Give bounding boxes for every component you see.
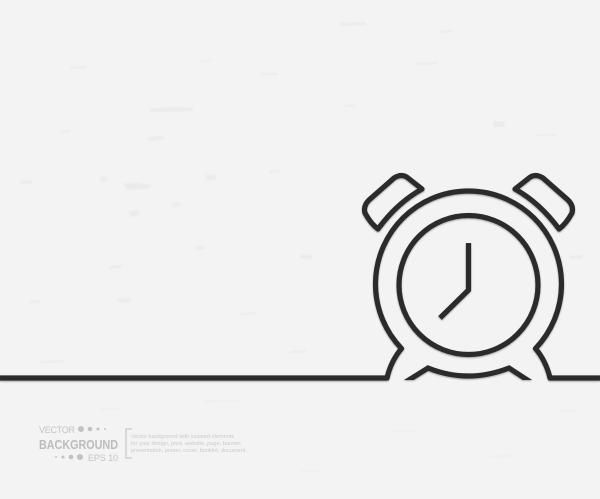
label: vector: VECTOR <box>39 425 76 435</box>
logo block: vector background <box>39 425 247 463</box>
line shadow <box>0 176 600 384</box>
description text: for your design, print, website, page, banner, <box>131 441 242 447</box>
icon: clock feet arc <box>404 368 532 383</box>
top dots <box>78 426 106 432</box>
bottom dots <box>55 454 83 460</box>
icon: clock hands <box>440 243 468 318</box>
description text: presentation, poster, cover, booklet, document. <box>131 448 247 454</box>
bracket <box>126 429 132 458</box>
icon: right bell <box>515 176 572 229</box>
alarm clock illustration with baseline <box>0 176 600 384</box>
description text: Vector background with isolated elements <box>131 434 234 440</box>
icon: clock face <box>399 216 538 354</box>
heading: background: BACKGROUND <box>39 437 118 452</box>
label: eps 10: EPS 10 <box>88 453 118 463</box>
icon: left bell <box>364 176 422 229</box>
icon: clock body and baseline <box>0 191 600 378</box>
